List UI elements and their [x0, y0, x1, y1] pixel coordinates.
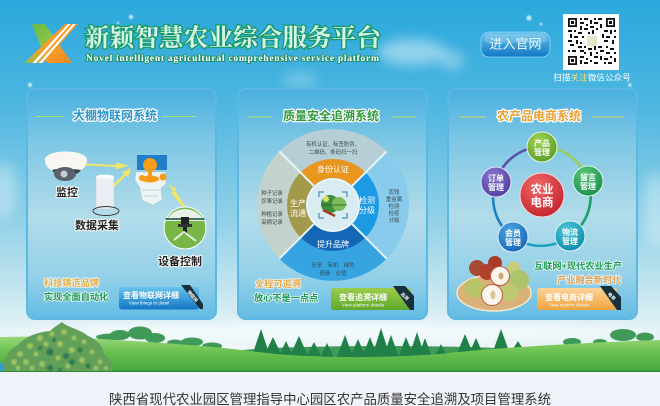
segment text: testing: 分级: [389, 216, 400, 224]
node: order management: 管理: [488, 182, 504, 192]
node: message management: 管理: [580, 181, 596, 191]
slogan: 互联网+现代农业生产: [534, 260, 622, 271]
segment text: testing: 检测: [359, 195, 375, 205]
icon: sprinkler device: [164, 207, 206, 249]
segment text: production: 种植记录: [261, 210, 283, 218]
node: logistics management: 物流: [562, 227, 578, 237]
node: message management: [573, 166, 603, 196]
node: agri e-commerce: 电商: [530, 195, 554, 209]
segment text: brand: 低碳 价值: [320, 269, 347, 277]
slogan: [44, 277, 108, 302]
distant shrubs: [96, 326, 654, 358]
button: view traceability details: View platform details: [342, 302, 385, 308]
slogan: [534, 260, 622, 285]
segment text: testing: 检疫: [389, 209, 400, 217]
panel: farm product e-commerce system: [448, 89, 637, 319]
panel: IoT greenhouse system: [27, 89, 216, 319]
node: logistics management: 管理: [562, 236, 578, 246]
node: order management: [481, 167, 511, 197]
logo X mark: [24, 24, 78, 63]
node: member management: 会员: [505, 228, 521, 238]
segment text: brand: 提升品牌: [317, 239, 349, 249]
segment text: production: 种子记录: [261, 189, 283, 197]
segment text: identity: 有机认证、标签防伪、: [306, 140, 360, 148]
segment text: testing: [359, 188, 402, 224]
node: member management: [498, 222, 528, 252]
QR code: [563, 14, 619, 70]
segment text: testing: 分级: [359, 205, 375, 215]
slogan: [254, 278, 318, 303]
slogan: 科技铸造品牌: [44, 277, 99, 288]
button: view e-commerce details: View system details: [549, 302, 590, 308]
segment text: production: [261, 189, 306, 226]
segment text: testing: 检测: [389, 202, 399, 210]
node: member management: 管理: [505, 237, 521, 247]
button: view e-commerce details: [537, 286, 621, 310]
segment text: production: 流通: [290, 208, 306, 218]
node: product management: [527, 132, 557, 162]
button: view e-commerce details: 查看电商详细: [545, 292, 593, 302]
segment text: brand: [311, 239, 355, 277]
button: view e-commerce details: 电商: [606, 291, 618, 302]
green field landscape: [0, 326, 660, 372]
node: product management: 产品: [534, 138, 550, 148]
label: data collection: 数据采集: [75, 218, 119, 232]
segment text: identity: [306, 140, 360, 174]
segment text: testing: 重金属: [386, 195, 402, 203]
node: order management: 订单: [488, 173, 504, 183]
node: agri e-commerce: [520, 173, 564, 217]
segment text: testing: 农残: [389, 188, 400, 196]
heading: traceability: 质量安全追溯系统: [283, 108, 379, 123]
icon: dome camera: [45, 152, 87, 181]
segment text: identity: 身份认证: [317, 164, 349, 174]
button: enter website: [481, 32, 550, 57]
heading: IoT system: 大棚物联网系统: [73, 108, 157, 122]
label: device control: 设备控制: [158, 254, 202, 268]
segment text: brand: 安全 有机 绿色: [311, 261, 355, 269]
icon: data collector: [93, 174, 119, 216]
slogan: 放心不是一点点: [254, 292, 318, 303]
heading: e-commerce: 农产品电商系统: [497, 108, 581, 123]
button: enter website: 进入官网: [489, 36, 542, 52]
subtitle: Novel intelligent agricultural comprehensive service platform: [86, 53, 379, 64]
button: view IoT details: [119, 285, 203, 310]
donut chart: [257, 129, 409, 281]
node: product management: 管理: [534, 147, 550, 157]
button: view traceability details: 查看追溯详细: [339, 292, 387, 302]
node: agri e-commerce: 农业: [530, 182, 554, 196]
button: view traceability details: [331, 286, 414, 310]
panel: quality traceability system: [238, 89, 427, 319]
segment text: production: 生产: [290, 198, 306, 208]
label: monitoring: 监控: [56, 185, 78, 199]
footer background: [0, 372, 660, 406]
segment text: identity: 二维码、条码扫一扫: [309, 148, 357, 156]
arrow: hub to device: [168, 184, 185, 207]
slogan: 实现全面自动化: [44, 291, 108, 302]
arrow: collector to hub: [113, 168, 131, 187]
button: view IoT details: 查看物联网详细: [123, 290, 179, 300]
tree line: [252, 328, 525, 360]
button: view IoT details: View things in detail: [129, 300, 169, 306]
segment text: production: 农事记录: [261, 197, 283, 205]
node: logistics management: [555, 221, 585, 251]
button: view IoT details: 物联网: [186, 289, 200, 304]
icon: central station: [135, 155, 167, 205]
arrow: camera to hub: [86, 162, 129, 170]
slogan: 产业融合新时代: [557, 274, 621, 285]
button: view traceability details: 追溯: [399, 291, 411, 302]
node: message management: 留言: [580, 172, 596, 182]
icon: bowl of dates: [457, 256, 531, 311]
segment text: production: 采摘记录: [261, 218, 283, 226]
QR caption: 扫描关注微信公众号: [553, 72, 631, 82]
title: 新颖智慧农业综合服务平台: [85, 24, 382, 52]
slogan: 全程可追溯: [255, 278, 301, 289]
cycle connector ring: [493, 147, 591, 246]
icon: vegetables: [319, 192, 347, 218]
bush foreground: [0, 322, 112, 372]
